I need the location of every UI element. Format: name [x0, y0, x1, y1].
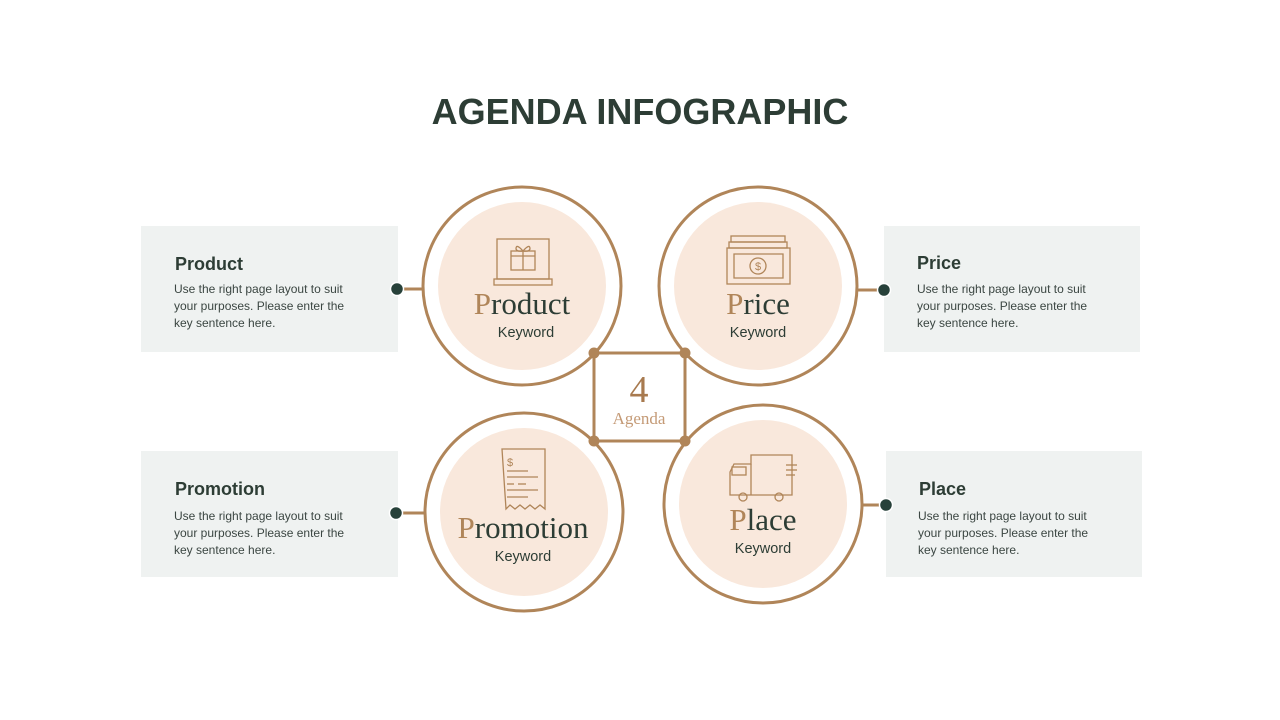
icon: receipt: $	[507, 457, 513, 469]
panel: place	[886, 451, 1142, 577]
panel: product	[141, 226, 398, 352]
connectors	[396, 289, 886, 513]
panel: price: Price	[917, 253, 961, 273]
panel: promotion	[141, 451, 398, 577]
panel: price: Use the right page layout to suit	[917, 282, 1086, 296]
panel: place: key sentence here.	[918, 543, 1019, 557]
panel: product: Product	[175, 254, 243, 274]
circle: price	[659, 187, 857, 385]
circle: place	[664, 405, 862, 603]
panel: promotion: your purposes. Please enter the	[174, 526, 344, 540]
circle: product: Product	[474, 286, 571, 321]
panel: place: Place	[919, 479, 966, 499]
panel: product: key sentence here.	[174, 316, 275, 330]
circle: promotion	[425, 413, 623, 611]
circle: promotion: Keyword	[495, 549, 551, 565]
icon: receipt	[502, 449, 545, 509]
circle: price: Keyword	[730, 325, 786, 341]
connector dots	[390, 282, 892, 520]
circle: place: Place	[729, 502, 797, 537]
panel: price	[884, 226, 1140, 352]
panel: product: Use the right page layout to suit	[174, 282, 343, 296]
circle: price: Price	[726, 286, 790, 321]
center square: 4	[630, 369, 648, 411]
panel: price: your purposes. Please enter the	[917, 299, 1087, 313]
panel: price: key sentence here.	[917, 316, 1018, 330]
center square: Agenda	[613, 409, 666, 428]
panel: promotion: Use the right page layout to suit	[174, 509, 343, 523]
circle: product	[423, 187, 621, 385]
panel: promotion: key sentence here.	[174, 543, 275, 557]
icon: money: $	[755, 261, 761, 273]
panel: place: Use the right page layout to suit	[918, 509, 1087, 523]
circle: place: Keyword	[735, 541, 791, 557]
icon: laptop gift	[494, 239, 552, 285]
circle: product: Keyword	[498, 325, 554, 341]
panel: promotion: Promotion	[175, 479, 265, 499]
icon: truck	[730, 455, 797, 501]
panel: place: your purposes. Please enter the	[918, 526, 1088, 540]
panel: product: your purposes. Please enter the	[174, 299, 344, 313]
icon: money	[727, 236, 790, 284]
title: AGENDA INFOGRAPHIC	[432, 91, 848, 132]
circle: promotion: Promotion	[458, 510, 589, 545]
center square	[588, 348, 690, 446]
